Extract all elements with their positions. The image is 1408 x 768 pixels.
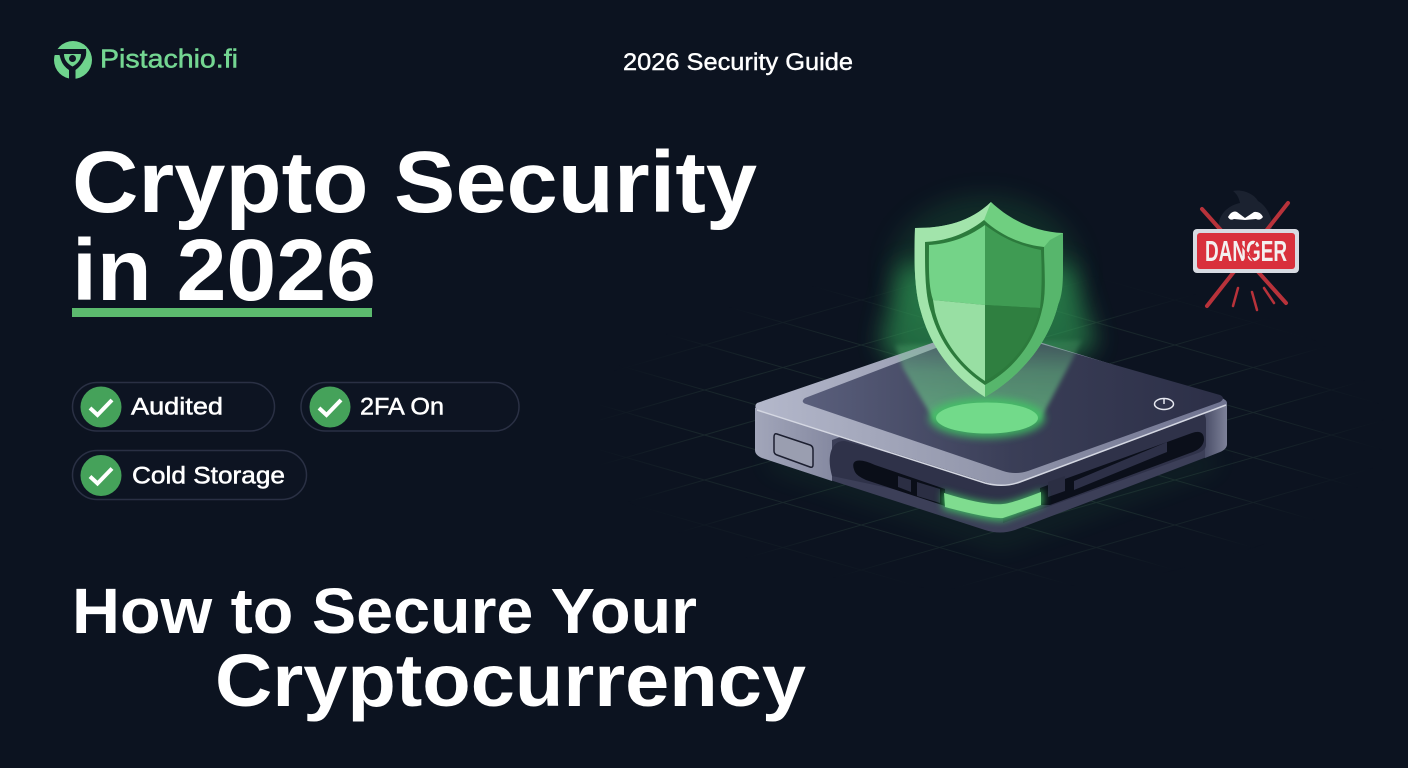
- badge: 2FA on: [301, 382, 519, 431]
- badge: cold storage: [72, 450, 306, 500]
- logo wordmark: Pistachio.fi: [100, 44, 238, 74]
- shield rim: [915, 202, 1063, 397]
- green halo: [880, 195, 1096, 368]
- badge: 2FA on: 2FA On: [360, 394, 444, 420]
- top panel: [803, 332, 1223, 473]
- badge: cold storage: Cold Storage: [132, 462, 285, 490]
- main title: Crypto Security: [72, 134, 757, 231]
- impact marks: [1233, 288, 1274, 310]
- main title: in 2026: [72, 222, 376, 319]
- subtitle: How to Secure Your: [72, 575, 697, 647]
- top face: [755, 328, 1227, 485]
- side slot right: [1040, 432, 1204, 505]
- device side walls: [755, 403, 1227, 532]
- title underline: [72, 308, 372, 317]
- hooded hacker: [1218, 191, 1272, 232]
- power icon: [1154, 398, 1174, 410]
- guide label: 2026 Security Guide: [623, 49, 853, 76]
- badge: audited: Audited: [131, 394, 223, 420]
- badge: audited: [72, 382, 274, 431]
- danger warning icon: [1193, 191, 1299, 310]
- danger sign: DANGER: [1205, 236, 1287, 268]
- device under-glow: [770, 460, 1215, 540]
- logo icon: [54, 41, 92, 80]
- main title: [72, 134, 757, 319]
- side slot left: [853, 460, 945, 506]
- side button: [774, 434, 813, 467]
- shield quadrants: [929, 225, 985, 305]
- led bar: [942, 490, 1043, 521]
- shield bevel: [925, 220, 1045, 385]
- holographic beam: [895, 340, 1082, 420]
- subtitle: Cryptocurrency: [215, 639, 806, 722]
- shield: [915, 202, 1063, 397]
- crossed lines: [1202, 203, 1288, 306]
- projection ellipse: [929, 398, 1045, 438]
- status badges: [72, 382, 519, 500]
- subtitle: [72, 575, 806, 722]
- hardware wallet illustration: [755, 195, 1227, 540]
- brand logo: [54, 41, 238, 80]
- device body: [755, 328, 1227, 532]
